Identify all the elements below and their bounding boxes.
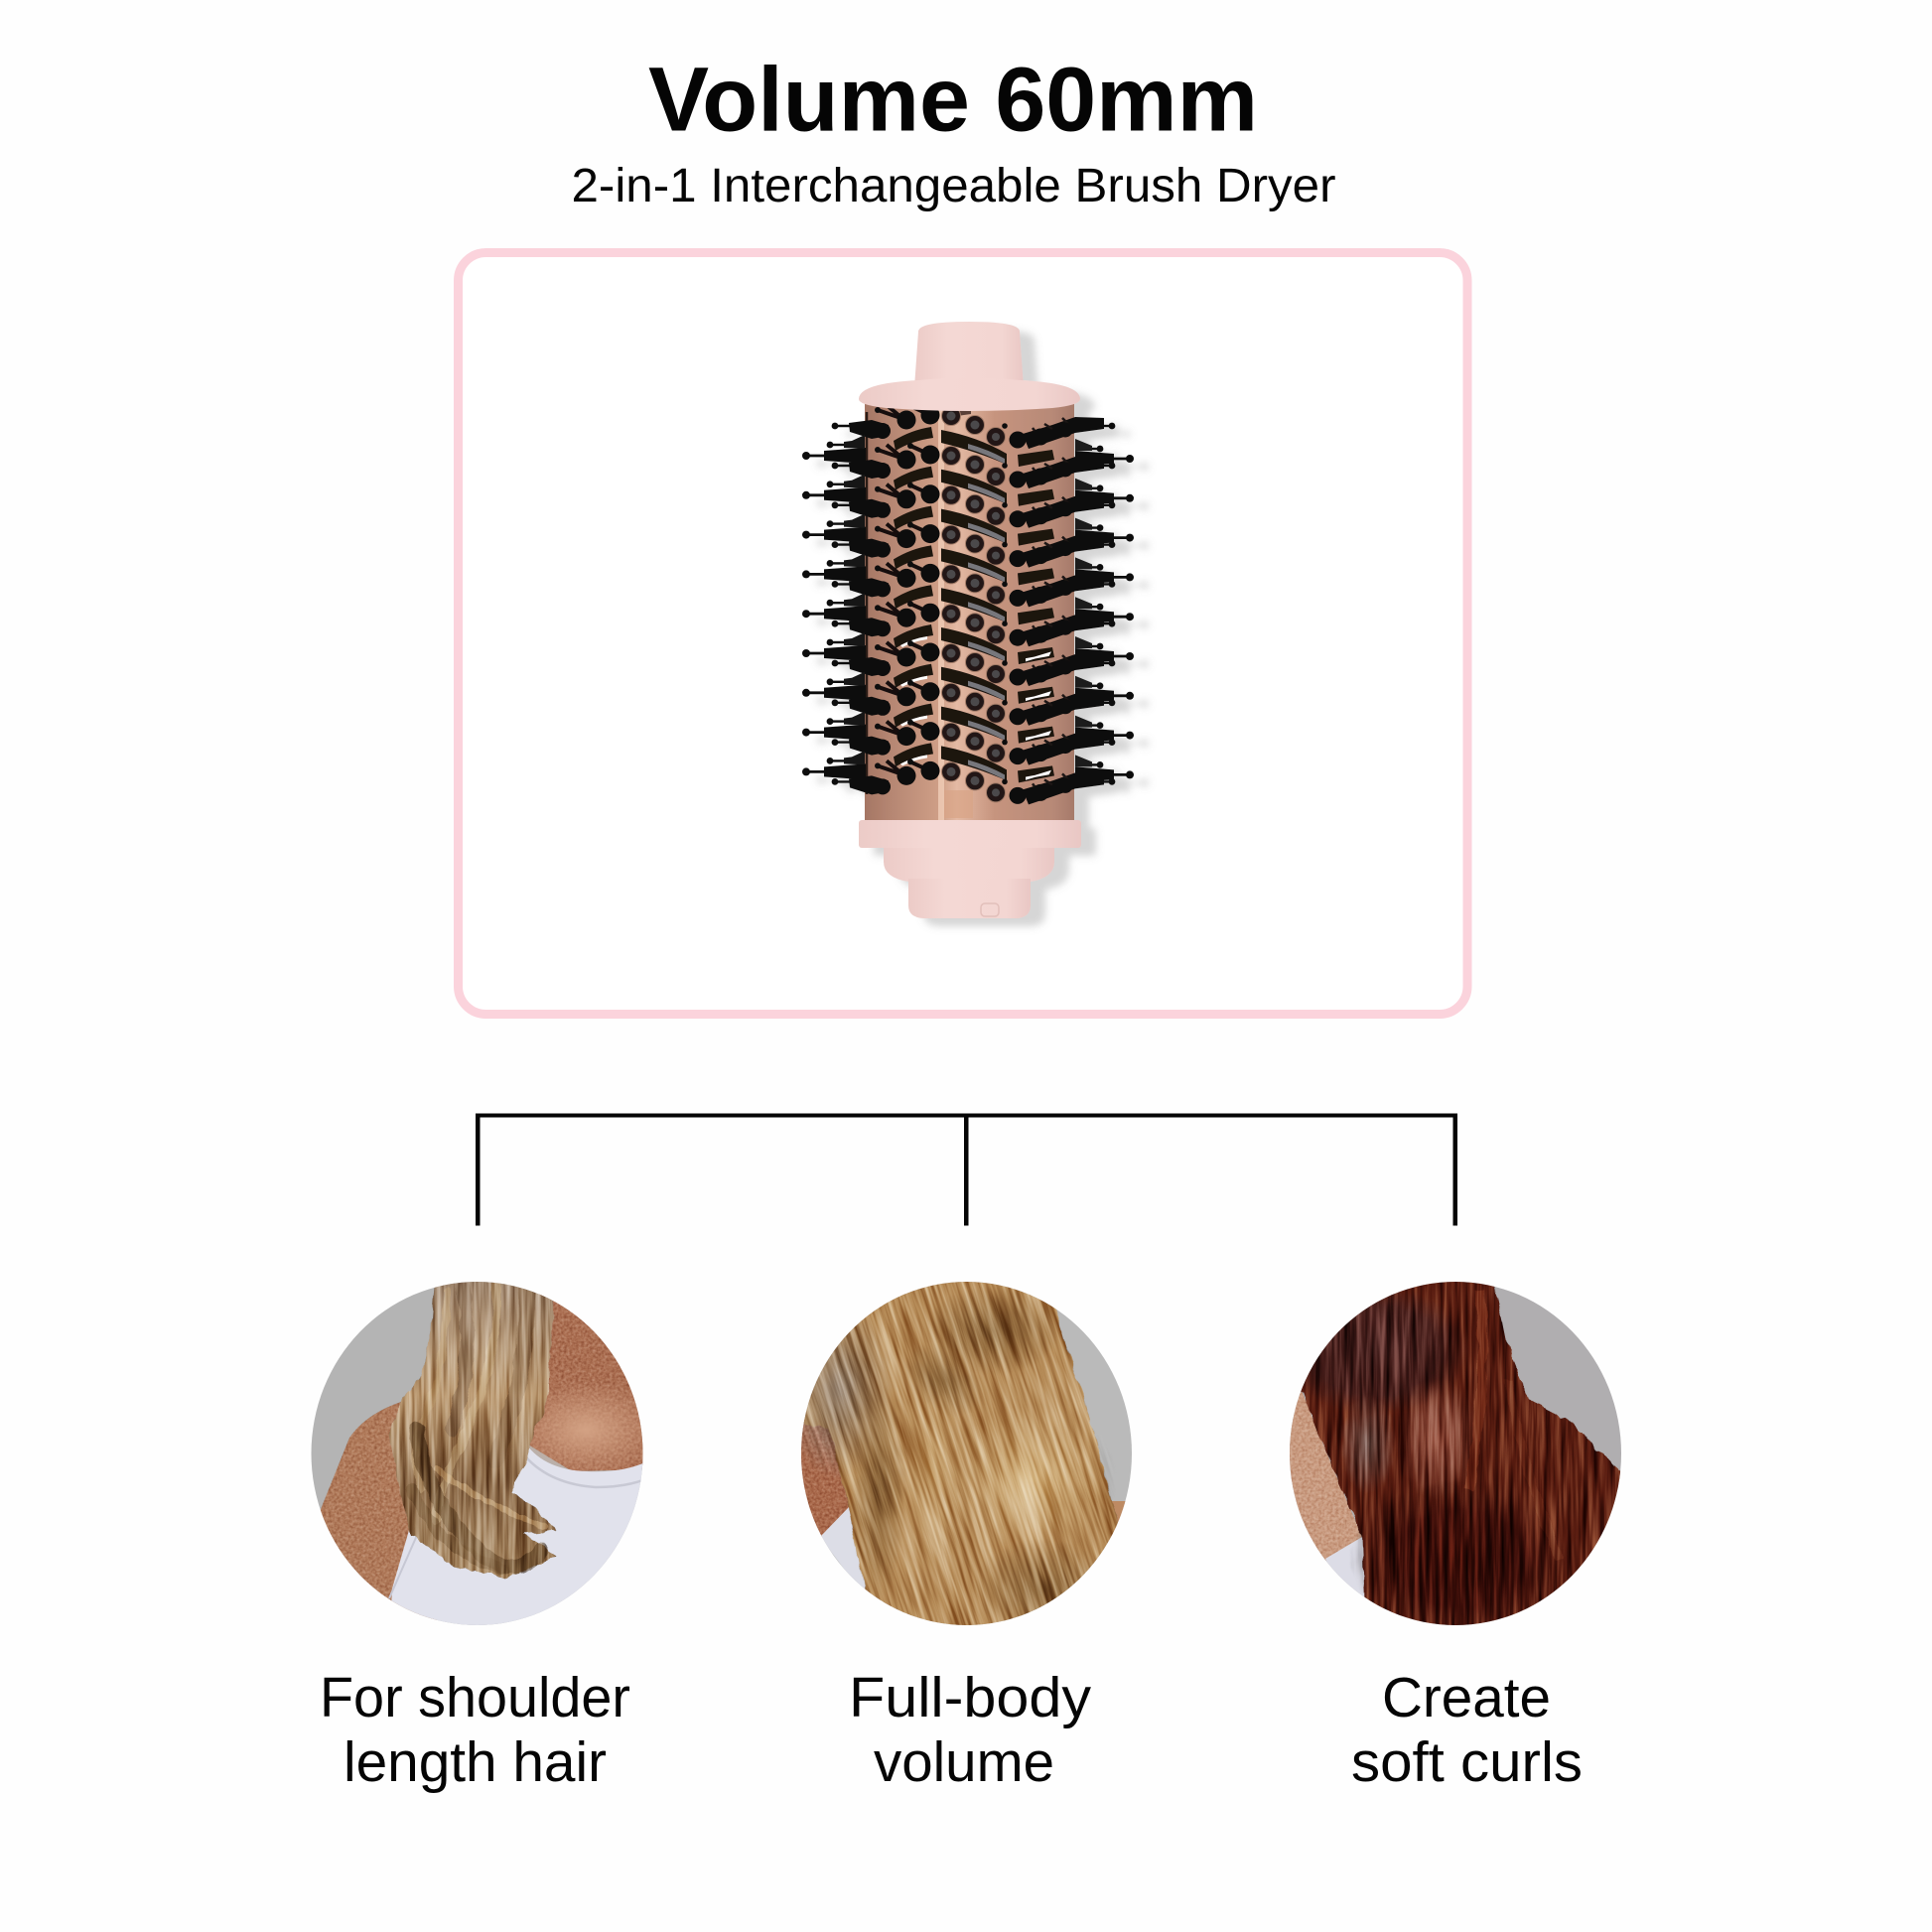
brush bristle rows	[802, 403, 1134, 804]
subtitle: 2-in-1 Interchangeable Brush Dryer	[572, 160, 1336, 212]
caption: shoulder length	[320, 1666, 630, 1794]
caption: shoulder length: For shoulder	[320, 1666, 630, 1729]
photo: soft curls	[1290, 1282, 1621, 1625]
connector lines	[476, 1114, 1457, 1225]
panel: product frame	[459, 252, 1467, 1015]
caption: soft curls	[1351, 1666, 1583, 1794]
photo: full-body volume	[801, 1282, 1132, 1625]
brush top cap	[859, 322, 1080, 411]
caption: full-body volume: Full-body	[849, 1666, 1092, 1729]
caption: soft curls: soft curls	[1351, 1730, 1583, 1794]
caption: soft curls: Create	[1382, 1666, 1551, 1729]
brush bottom collar	[859, 820, 1081, 918]
title: Volume 60mm	[648, 50, 1258, 151]
caption: full-body volume	[849, 1666, 1092, 1794]
caption: full-body volume: volume	[874, 1730, 1054, 1794]
caption: shoulder length: length hair	[344, 1730, 607, 1794]
brush barrel	[865, 402, 1074, 824]
photo: shoulder length hair	[312, 1282, 643, 1625]
product: round brush attachment	[802, 322, 1134, 918]
